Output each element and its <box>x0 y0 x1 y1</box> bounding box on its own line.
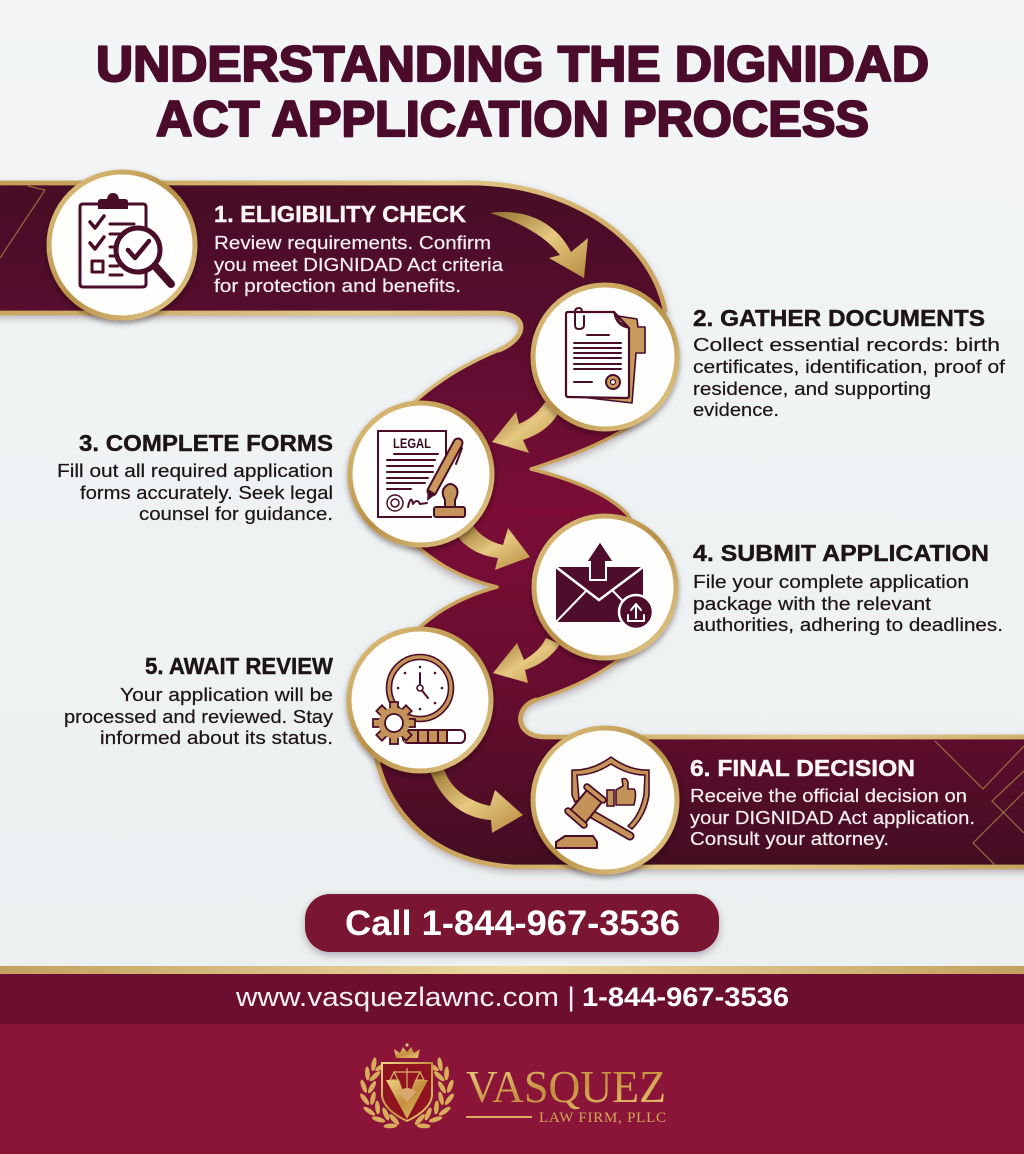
badge 4 <box>534 516 676 658</box>
text 2 <box>693 305 1006 420</box>
text 5 <box>64 653 334 748</box>
logo: wordmark: VASQUEZ <box>466 1061 666 1112</box>
logo: wordmark: LAW FIRM, PLLC <box>539 1110 666 1126</box>
footer contact band: www.vasquezlawnc.com | <box>235 982 575 1012</box>
text 6: your DIGNIDAD Act application. <box>690 807 975 828</box>
text 3: forms accurately. Seek legal <box>80 482 333 503</box>
title <box>96 36 929 147</box>
badge 5 <box>349 629 491 771</box>
logo: crest <box>359 1043 455 1129</box>
icon: legal form with pen and stamp: LEGAL <box>393 435 431 451</box>
arrow 1 <box>490 212 588 278</box>
call button: Call 1-844-967-3536 <box>345 904 680 943</box>
arrow 4 <box>493 638 560 683</box>
text 3 <box>57 430 333 524</box>
arrow 3 <box>456 524 530 570</box>
text 4: File your complete application <box>693 571 969 592</box>
badge 2 <box>533 285 677 429</box>
winding ribbon path <box>0 183 1024 867</box>
icon: document folder <box>566 308 645 403</box>
decorative corner lines <box>0 186 1024 865</box>
text 6: 6. FINAL DECISION <box>690 755 915 781</box>
arrow 2 <box>492 402 560 453</box>
text 5: Your application will be <box>120 684 333 705</box>
footer logo area <box>0 1024 1024 1154</box>
text 5: processed and reviewed. Stay <box>64 706 334 727</box>
text 2: 2. GATHER DOCUMENTS <box>693 305 985 331</box>
text 6 <box>690 755 975 849</box>
text 2: residence, and supporting <box>693 378 931 399</box>
footer contact band <box>0 966 1024 1024</box>
text 1: you meet DIGNIDAD Act criteria <box>214 254 504 275</box>
step 1: eligibility check <box>49 172 588 318</box>
footer contact band: 1-844-967-3536 <box>582 982 789 1012</box>
icon: shield, thumb and gavel <box>556 757 649 848</box>
text 3: Fill out all required application <box>57 460 333 481</box>
text 5: 5. AWAIT REVIEW <box>145 653 333 679</box>
badge 1 <box>49 172 195 318</box>
text 4: package with the relevant <box>693 593 931 614</box>
icon: clipboard with magnifier <box>80 193 171 287</box>
text 4: 4. SUBMIT APPLICATION <box>693 540 989 566</box>
text 1: Review requirements. Confirm <box>214 232 491 253</box>
step 4: submit application <box>493 516 1003 683</box>
step 2: gather documents <box>492 285 1006 453</box>
badge 3 <box>350 403 492 545</box>
text 2: Collect essential records: birth <box>693 334 1000 355</box>
title: UNDERSTANDING THE DIGNIDAD <box>96 36 929 92</box>
text 5: informed about its status. <box>100 727 333 748</box>
text 6: Consult your attorney. <box>690 828 889 849</box>
badge 6 <box>533 728 677 872</box>
step 6: final decision <box>533 728 975 872</box>
icon: legal form with pen and stamp <box>378 431 465 517</box>
step 5: await review <box>64 629 523 833</box>
text 3: counsel for guidance. <box>139 503 333 524</box>
icon: envelope with upload <box>556 541 653 629</box>
title: ACT APPLICATION PROCESS <box>156 91 869 147</box>
text 6: Receive the official decision on <box>690 785 967 806</box>
text 4: authorities, adhering to deadlines. <box>693 614 1003 635</box>
arrow 5 <box>428 766 523 833</box>
text 1: for protection and benefits. <box>214 275 461 296</box>
call button <box>305 894 719 952</box>
step 3: complete forms <box>57 403 530 570</box>
text 2: certificates, identification, proof of <box>693 356 1006 377</box>
text 3: 3. COMPLETE FORMS <box>79 430 333 456</box>
icon: clock, gear and progress bar <box>373 654 465 744</box>
text 2: evidence. <box>693 399 779 420</box>
text 1 <box>214 201 504 296</box>
text 4 <box>693 540 1003 635</box>
text 1: 1. ELIGIBILITY CHECK <box>214 201 466 227</box>
